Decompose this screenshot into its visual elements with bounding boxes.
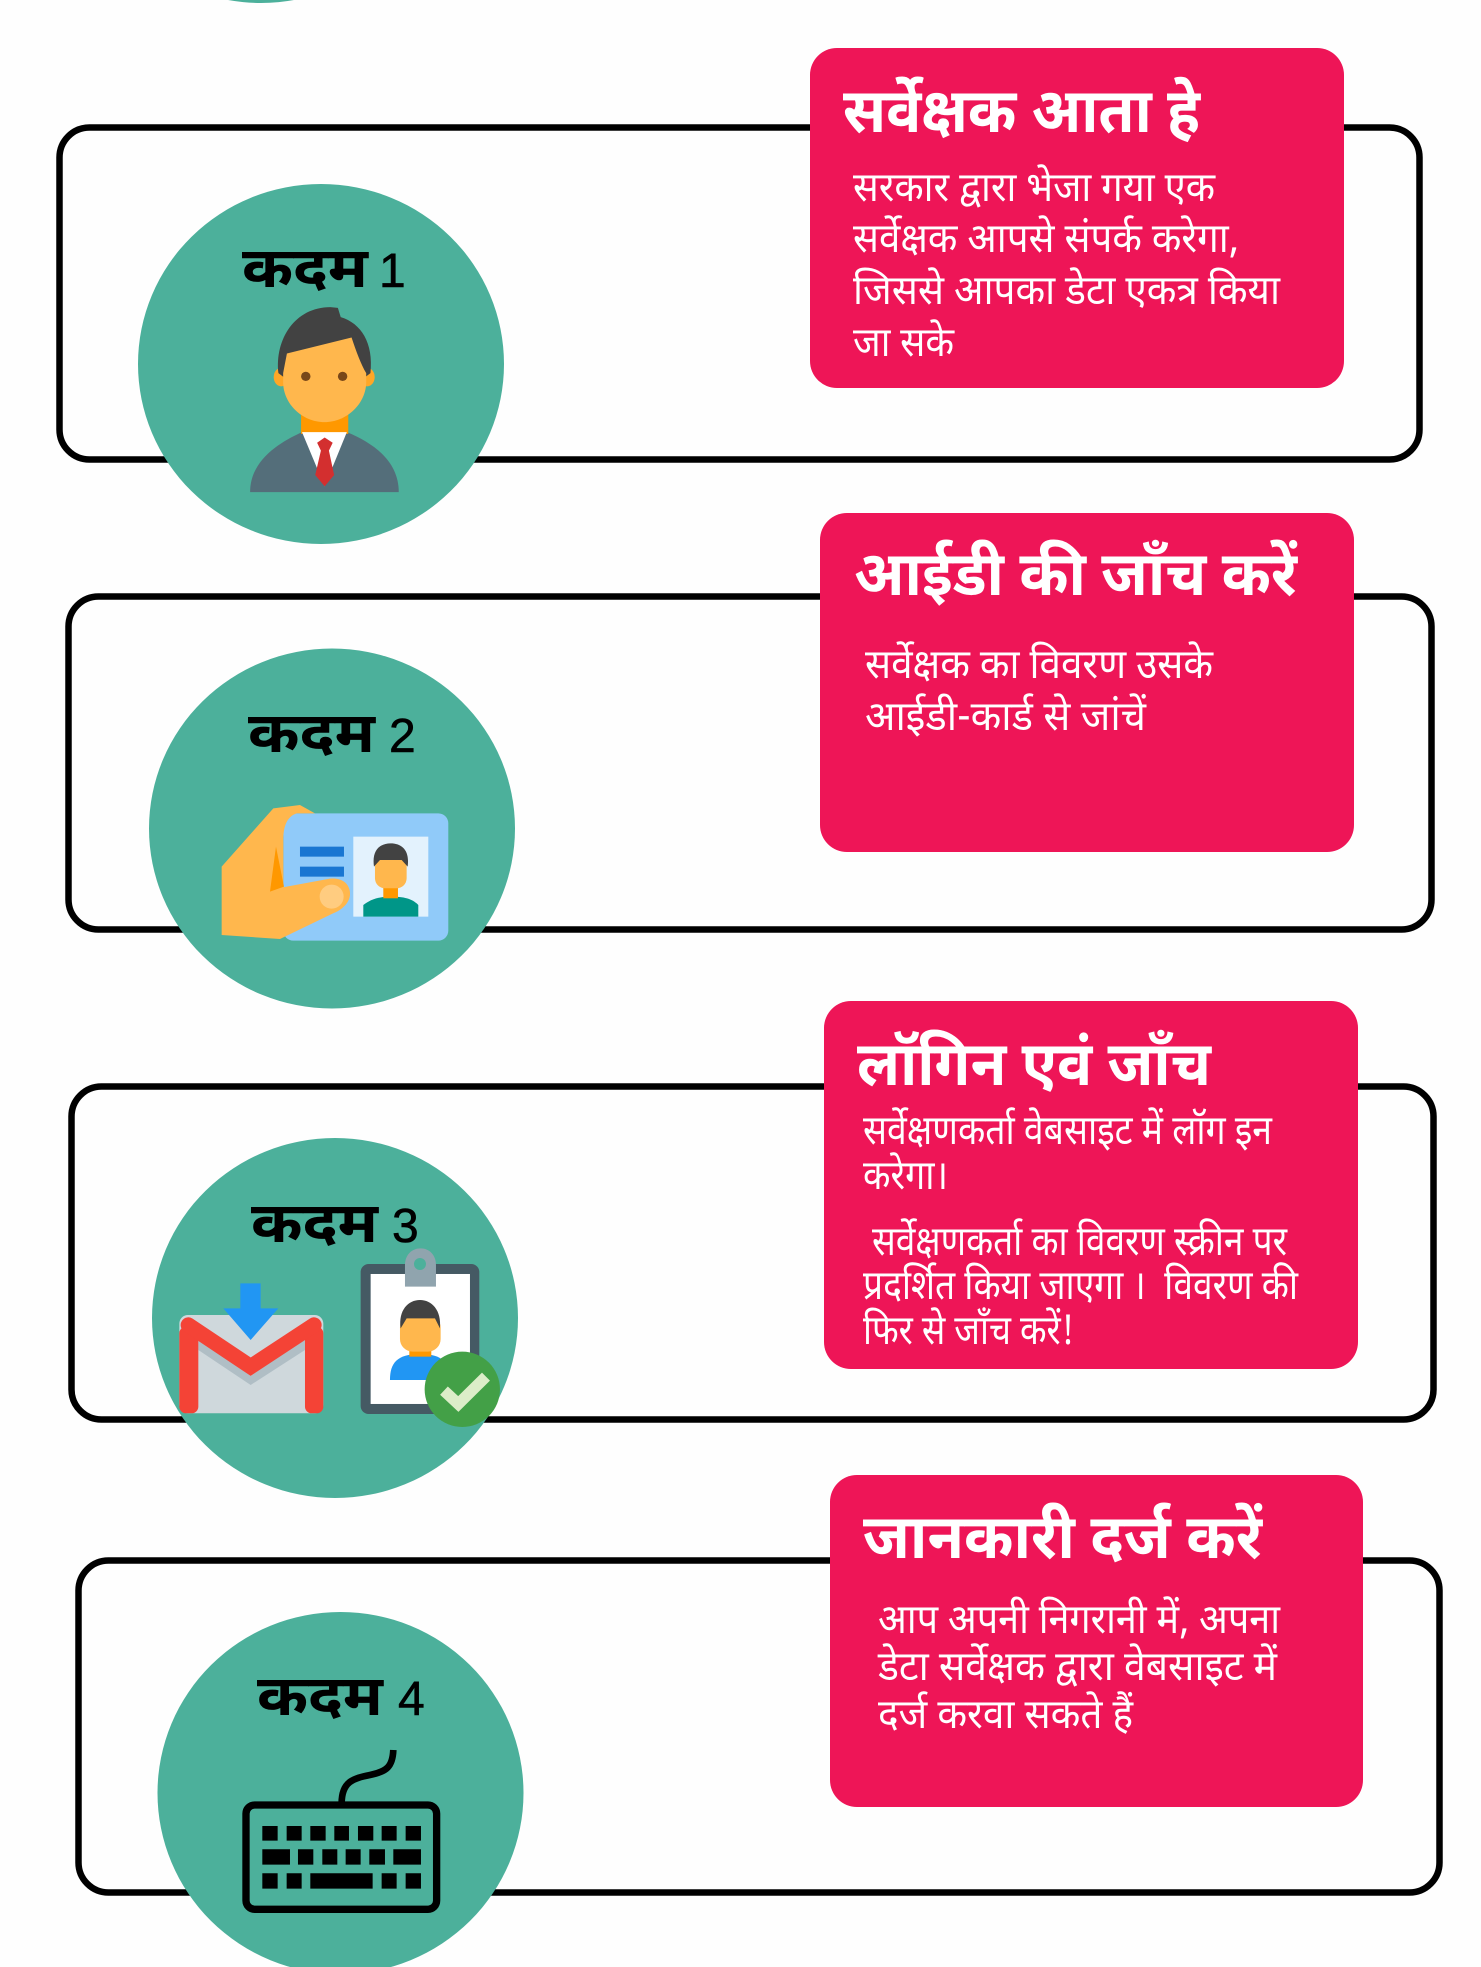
callout body: प्रदर्शित किया जाएगा । विवरण की bbox=[863, 1262, 1299, 1316]
callout body bbox=[863, 1106, 1299, 1361]
callout background bbox=[824, 1001, 1358, 1369]
step 4 label: कदम bbox=[257, 1665, 385, 1738]
icon: surveyor bbox=[250, 307, 399, 492]
step 1 frame bbox=[60, 128, 1420, 460]
callout: step 1 bbox=[810, 48, 1344, 388]
callout body bbox=[853, 163, 1281, 373]
step 4 label: 4 bbox=[398, 1673, 425, 1726]
icon: hand holding ID card bbox=[222, 805, 448, 941]
callout body: सर्वेक्षक आपसे संपर्क करेगा, bbox=[853, 214, 1239, 269]
step 3 label: कदम bbox=[251, 1192, 380, 1265]
callout: step 3 bbox=[824, 1001, 1358, 1369]
callout body: आईडी-कार्ड से जांचें bbox=[865, 692, 1147, 747]
callout background bbox=[820, 513, 1354, 852]
step 2 label: कदम bbox=[248, 702, 377, 775]
icon: verified ID badge bbox=[361, 1248, 500, 1427]
callout body: फिर से जाँच करें! bbox=[863, 1306, 1074, 1361]
callout body: आप अपनी निगरानी में, अपना bbox=[878, 1596, 1281, 1650]
step 4 label bbox=[257, 1665, 425, 1738]
callout body: सर्वेक्षक का विवरण उसके bbox=[865, 640, 1214, 695]
callout body bbox=[877, 1596, 1281, 1745]
step 4 circle bbox=[158, 1612, 524, 1967]
step 2 label: 2 bbox=[389, 710, 416, 763]
callout body: सरकार द्वारा भेजा गया एक bbox=[853, 163, 1216, 218]
callout: step 2 bbox=[820, 513, 1354, 852]
icon: keyboard bbox=[246, 1750, 437, 1909]
callout body: जिससे आपका डेटा एकत्र किया bbox=[853, 266, 1281, 321]
step 4 frame bbox=[78, 1560, 1440, 1892]
step 1 label bbox=[242, 237, 406, 310]
callout body: सर्वेक्षणकर्ता वेबसाइट में लॉग इन bbox=[863, 1106, 1273, 1161]
step 2 circle bbox=[149, 648, 515, 1008]
panel: step 1 bbox=[60, 48, 1420, 544]
step 2 label bbox=[248, 702, 416, 775]
callout body: सर्वेक्षणकर्ता का विवरण स्क्रीन पर bbox=[872, 1218, 1288, 1272]
icon: gmail envelope bbox=[179, 1283, 323, 1413]
panel: step 4 bbox=[78, 1475, 1440, 1967]
step 1 label: 1 bbox=[379, 245, 406, 298]
step 3 label bbox=[251, 1192, 419, 1265]
callout: step 4 bbox=[830, 1475, 1363, 1807]
callout body bbox=[865, 640, 1214, 747]
callout background bbox=[810, 48, 1344, 388]
callout heading: जानकारी दर्ज करें bbox=[863, 1502, 1264, 1584]
step 3 frame bbox=[72, 1086, 1434, 1420]
callout heading: आईडी की जाँच करें bbox=[854, 538, 1299, 621]
callout body: करेगा। bbox=[863, 1151, 948, 1206]
step 3 label: 3 bbox=[392, 1200, 419, 1253]
callout background bbox=[830, 1475, 1363, 1807]
callout body: डेटा सर्वेक्षक द्वारा वेबसाइट में bbox=[877, 1642, 1278, 1697]
step 1 circle bbox=[138, 184, 504, 544]
panel: step 2 bbox=[68, 513, 1432, 1008]
previous step circle remnant bbox=[79, 0, 443, 3]
step 3 circle bbox=[152, 1138, 518, 1498]
callout body: जा सके bbox=[853, 318, 955, 373]
callout heading: सर्वेक्षक आता हे bbox=[843, 75, 1202, 158]
step 2 frame bbox=[68, 596, 1432, 930]
panel: step 3 bbox=[72, 1001, 1434, 1498]
callout heading: लॉगिन एवं जाँच bbox=[857, 1028, 1212, 1111]
callout body: दर्ज करवा सकते हैं bbox=[878, 1690, 1134, 1745]
step 1 label: कदम bbox=[242, 237, 370, 310]
